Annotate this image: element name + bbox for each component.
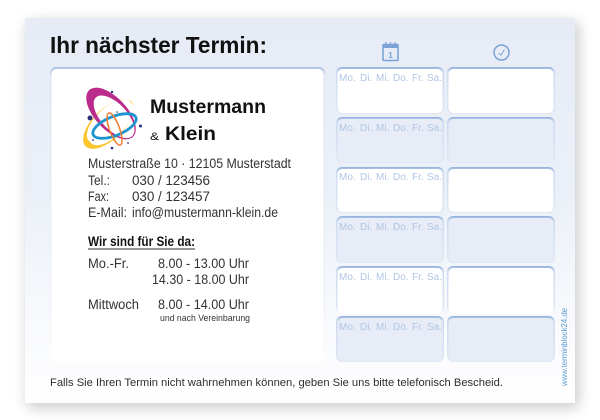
row 1 date: Sa. [427,73,442,84]
contact details: Musterstraße 10 · 12105 Musterstadt [88,156,291,171]
row 6 date: Do. [393,322,409,333]
row 1 date: Fr. [412,73,424,84]
row 1 date: Mo. [339,73,356,84]
row 2 date: Fr. [412,123,424,134]
contact details: 030 / 123456 [132,173,210,188]
logo wordmark [150,97,266,145]
icon: clock [494,45,509,60]
row 1 date: Do. [393,73,409,84]
row 4 time [447,216,555,263]
row 3 time [447,167,555,213]
opening hours: Mittwoch [88,297,139,312]
title: Ihr nächster Termin: [50,32,267,58]
row 1 date [336,67,444,114]
row 1 time [447,67,555,114]
panel: practice details [50,67,325,362]
row 5 time [447,266,555,314]
icon: calendar [383,42,398,60]
row 4 date: Di. [360,222,372,233]
opening hours: und nach Vereinbarung [160,313,250,324]
row 5 date [336,266,444,314]
row 6 date: Mi. [376,322,389,333]
row 2 date: Di. [360,123,372,134]
row 2 date [336,117,444,163]
opening hours: 8.00 - 14.00 Uhr [158,297,249,312]
row 3 date: Di. [360,172,372,183]
row 6 date: Mo. [339,322,356,333]
contact details: E-Mail: [88,205,127,220]
contact details [88,156,291,220]
row 3 date: Do. [393,172,409,183]
opening hours: Mo.-Fr. [88,256,129,271]
logo wordmark: Mustermann [150,97,266,118]
row 4 date: Sa. [427,222,442,233]
opening hours: 14.30 - 18.00 Uhr [152,272,249,287]
logo wordmark: & [150,131,160,143]
contact details: Tel.: [88,173,110,188]
opening hours heading: Wir sind für Sie da: [88,234,195,249]
contact details: Fax: [88,189,109,204]
opening hours: 8.00 - 13.00 Uhr [158,256,249,271]
row 2 time [447,117,555,163]
logo icon [75,79,145,157]
row 5 date: Sa. [427,272,442,283]
row 1 date: Mi. [376,73,389,84]
row 3 date: Sa. [427,172,442,183]
logo wordmark: Klein [165,124,216,145]
footer note: Falls Sie Ihren Termin nicht wahrnehmen können, geben Sie uns bitte telefonisch Bescheid. [50,377,503,389]
vertical website url: www.terminblock24.de [560,307,569,387]
row 3 date [336,167,444,213]
row 2 date: Mi. [376,123,389,134]
row 6 date [336,316,444,362]
row 5 date: Do. [393,272,409,283]
row 3 date: Mo. [339,172,356,183]
opening hours [88,256,250,324]
contact details: 030 / 123457 [132,189,210,204]
row 3 date: Fr. [412,172,424,183]
row 6 time [447,316,555,362]
row 2 date: Mo. [339,123,356,134]
contact details: info@mustermann-klein.de [132,205,278,220]
row 6 date: Sa. [427,322,442,333]
row 6 date: Di. [360,322,372,333]
row 2 date: Sa. [427,123,442,134]
row 5 date: Di. [360,272,372,283]
row 5 date: Fr. [412,272,424,283]
row 1 date: Di. [360,73,372,84]
row 4 date: Do. [393,222,409,233]
row 4 date: Mi. [376,222,389,233]
icon: calendar: 1 [388,50,393,60]
row 6 date: Fr. [412,322,424,333]
row 3 date: Mi. [376,172,389,183]
table: appointment slots [336,67,555,362]
row 4 date: Mo. [339,222,356,233]
row 5 date: Mi. [376,272,389,283]
row 4 date [336,216,444,263]
row 5 date: Mo. [339,272,356,283]
row 4 date: Fr. [412,222,424,233]
row 2 date: Do. [393,123,409,134]
